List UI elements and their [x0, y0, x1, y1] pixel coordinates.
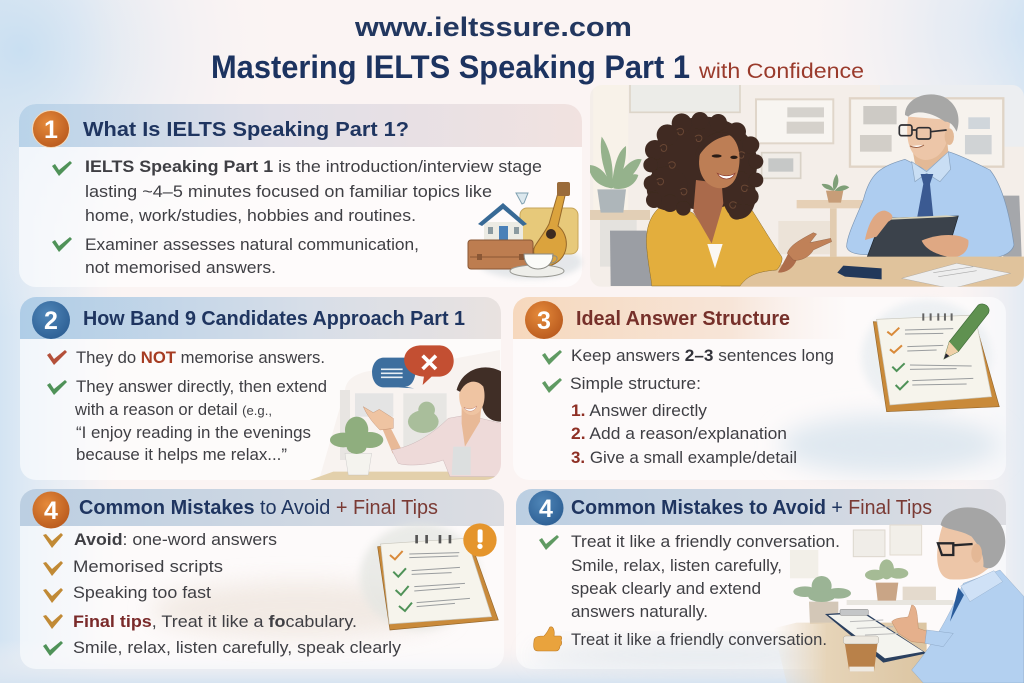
left plant	[330, 417, 383, 475]
suitcase	[468, 240, 533, 269]
badge 4 blue	[528, 490, 564, 526]
woman blouse	[392, 415, 502, 477]
badge 1: 1	[44, 116, 58, 144]
title block	[211, 12, 864, 85]
examiner	[847, 94, 1014, 259]
guitar	[534, 182, 570, 265]
student face	[699, 135, 740, 188]
blue speech bubble	[372, 358, 416, 388]
amber check icon	[43, 561, 63, 576]
tea cup and saucer	[510, 254, 564, 277]
check icon	[52, 161, 72, 176]
amber check icon	[43, 588, 63, 603]
second tip text: Treat it like a friendly conversation.	[571, 631, 827, 649]
glasses	[938, 543, 973, 555]
hair highlights	[657, 128, 748, 208]
office background	[590, 80, 1024, 287]
second bullet text: They answer directly, then extend	[76, 378, 327, 396]
examiner neck and face	[913, 143, 948, 170]
badge 2: 2	[44, 307, 58, 335]
table	[310, 472, 500, 480]
icon: checklist notebook with warning badge	[360, 523, 498, 630]
student eyes and smile	[712, 154, 722, 158]
inner top	[452, 447, 471, 475]
ear	[971, 544, 982, 563]
second bullet text: because it helps me relax...”	[76, 446, 287, 464]
examiner shirt	[847, 152, 1014, 259]
head	[937, 523, 990, 580]
table top	[720, 257, 1024, 287]
tie	[950, 587, 964, 622]
numbered steps: 1. Answer directly	[571, 402, 708, 420]
panel 3: Ideal Answer Structure	[513, 297, 1006, 480]
badge 2	[32, 301, 70, 339]
amber check icon	[43, 614, 63, 629]
badge 3	[525, 301, 563, 339]
photo: student and examiner at a table	[588, 80, 1024, 289]
panel 4 left heading: Common Mistakes to Avoid + Final Tips	[79, 497, 438, 519]
right plant	[408, 402, 439, 433]
second bullet text	[74, 378, 327, 464]
check icon	[43, 641, 63, 656]
mistakes and tips list: Speaking too fast	[73, 584, 211, 602]
panel 2 heading: How Band 9 Candidates Approach Part 1	[83, 308, 465, 330]
check icon	[542, 378, 562, 393]
panel 4 right heading: Common Mistakes to Avoid + Final Tips	[571, 497, 932, 519]
badge 4 blue: 4	[539, 495, 553, 523]
panel 1 first bullet text	[85, 158, 542, 225]
woman hair	[457, 367, 502, 422]
examiner collar	[912, 152, 951, 182]
woman face	[459, 382, 485, 415]
check icon	[52, 237, 72, 252]
mistakes and tips list: Smile, relax, listen carefully, speak clearly	[73, 639, 402, 657]
examiner glasses	[899, 125, 947, 139]
icon: thumbs up	[534, 627, 562, 651]
papers	[902, 263, 1011, 289]
examiner hair	[905, 94, 959, 132]
coffee cup	[843, 636, 879, 672]
hair	[941, 507, 1005, 568]
mistakes and tips list: Avoid: one-word answers	[74, 531, 277, 549]
website url heading: www.ieltssure.com	[354, 12, 632, 42]
examiner hands	[865, 211, 892, 240]
student	[643, 112, 832, 286]
illustration: examiner with clipboard	[773, 507, 1024, 683]
red check icon	[47, 350, 67, 365]
left plant	[588, 137, 642, 213]
badge 4 orange	[32, 492, 70, 528]
panel 4 right header band	[516, 489, 1006, 525]
panel 3 header band	[513, 297, 850, 339]
student white top	[707, 244, 723, 268]
panel 1 second bullet text: not memorised answers.	[85, 259, 276, 277]
first bullet text: They do NOT memorise answers.	[76, 349, 325, 367]
panel 1: What Is IELTS Speaking Part 1	[19, 104, 582, 287]
icon: checklist notebook with pencil	[862, 300, 999, 413]
title suffix: with Confidence	[698, 60, 864, 83]
woman arm and hand	[382, 428, 401, 454]
student arm and hand	[778, 253, 797, 273]
numbered steps: 2. Add a reason/explanation	[571, 425, 787, 443]
panel 1 header band	[19, 104, 582, 147]
numbered steps: 3. Give a small example/detail	[571, 449, 797, 467]
panel 2 header band	[20, 297, 501, 339]
student curly hair	[643, 112, 763, 220]
office scene	[790, 525, 953, 624]
small fan ornament	[516, 193, 528, 204]
woman neck	[462, 403, 482, 447]
panel 1 second bullet text	[85, 236, 419, 277]
main title: Mastering IELTS Speaking Part 1	[211, 49, 690, 85]
panel 1 first bullet text: IELTS Speaking Part 1 is the introduction/interview stage	[85, 158, 542, 176]
panel 1 heading: What Is IELTS Speaking Part 1?	[83, 119, 409, 141]
first bullet text: Keep answers 2–3 sentences long	[571, 347, 834, 365]
student neck and chest	[693, 180, 723, 243]
phone case	[837, 266, 882, 279]
second bullet text: “I enjoy reading in the evenings	[76, 424, 311, 442]
first tip text: Treat it like a friendly conversation.	[571, 533, 840, 551]
first tip text: answers naturally.	[571, 603, 708, 621]
chair	[978, 609, 1024, 683]
panel 1 first bullet text: home, work/studies, hobbies and routines.	[85, 207, 416, 225]
check icon	[539, 535, 559, 550]
examiner tie	[917, 174, 933, 217]
collar	[961, 571, 1003, 602]
tablet	[867, 216, 958, 257]
badge 4 orange: 4	[44, 497, 58, 525]
chairs	[610, 231, 652, 286]
panel 3 heading: Ideal Answer Structure	[576, 308, 790, 330]
amber check icon	[43, 533, 63, 548]
second bullet text: with a reason or detail (e.g.,	[74, 401, 272, 419]
panel 4 left header band	[20, 489, 504, 526]
desk	[773, 623, 927, 683]
panel 4 left: Common Mistakes to Avoid and Final Tips	[20, 489, 504, 669]
illustration: woman gesturing with speech bubbles	[310, 345, 502, 480]
student cardigan	[646, 200, 782, 286]
mistakes and tips list: Final tips , Treat it like a focabulary.	[73, 613, 357, 631]
mistakes and tips list	[73, 531, 402, 657]
badge 1	[32, 110, 70, 148]
thumbs-up hand	[892, 605, 928, 643]
panel 1 first bullet text: lasting ~4–5 minutes focused on familiar topics like	[85, 183, 492, 201]
mistakes and tips list: Memorised scripts	[73, 558, 223, 576]
examiner shirt	[912, 570, 1024, 683]
first tip text	[571, 533, 840, 621]
panel 4 right: Common Mistakes to Avoid and Final Tips	[516, 489, 1024, 683]
yellow case	[520, 208, 578, 254]
house	[478, 203, 527, 242]
check icon	[47, 380, 67, 395]
clipboard	[825, 609, 927, 663]
small table plant	[822, 174, 849, 203]
check icon	[542, 350, 562, 365]
icon: house, suitcase, guitar and cup	[468, 182, 582, 279]
red speech bubble	[404, 345, 454, 385]
second bullet text: Simple structure:	[570, 375, 701, 393]
panel 1 second bullet text: Examiner assesses natural communication,	[85, 236, 419, 254]
badge 3: 3	[537, 307, 551, 335]
first tip text: speak clearly and extend	[571, 580, 761, 598]
first tip text: Smile, relax, listen carefully,	[571, 557, 782, 575]
numbered steps	[571, 402, 797, 467]
panel 2: How Band 9 Candidates Approach Part 1	[20, 297, 502, 480]
